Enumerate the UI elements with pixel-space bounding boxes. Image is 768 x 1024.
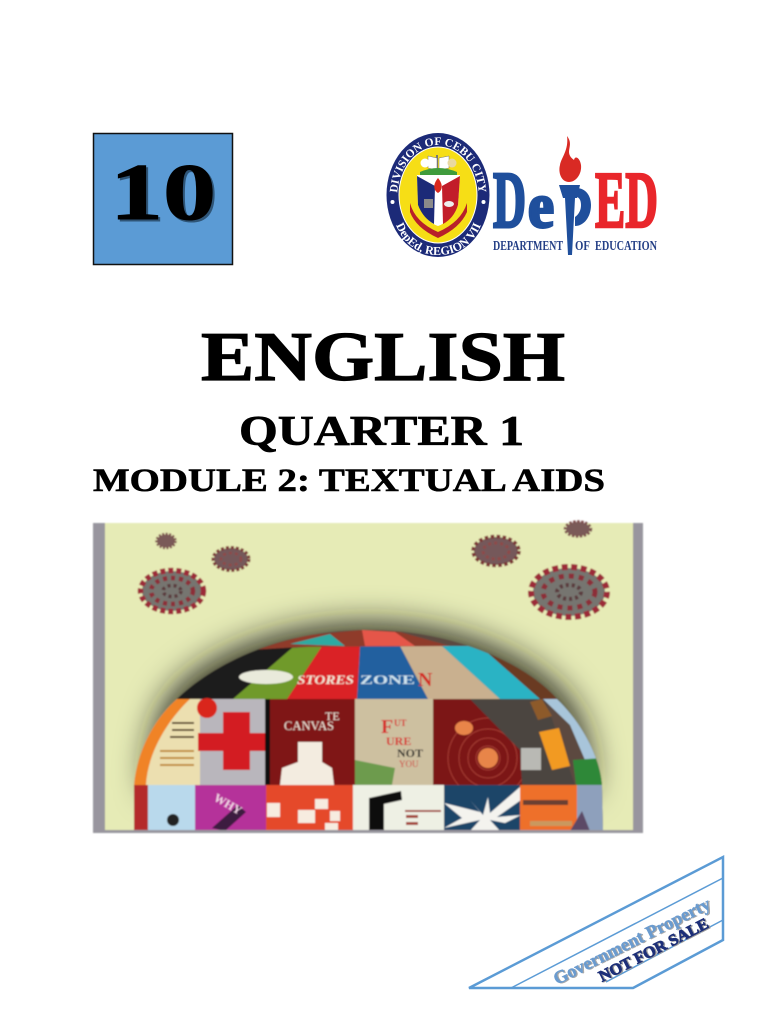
middle row covers: TE	[325, 709, 340, 723]
title: English: ENGLISH	[201, 319, 565, 396]
middle row covers	[134, 698, 602, 798]
logo: DepED: EDUCATION	[595, 239, 657, 254]
middle row covers: NOT	[397, 746, 423, 760]
bottom row covers: WHY	[212, 790, 245, 818]
cover illustration panel	[93, 522, 643, 833]
logo: Division of Cebu City seal	[386, 133, 490, 257]
logo: DepED	[493, 136, 658, 255]
middle row covers: URE	[386, 734, 411, 748]
logo: Division of Cebu City seal: DepEd, REGION VII	[396, 222, 481, 255]
stamp: Government Property, Not For Sale: NOT FOR SALE	[596, 915, 712, 986]
grade number box	[94, 134, 232, 264]
top row covers: ZONE	[360, 672, 415, 687]
dome shadow	[150, 625, 590, 790]
stamp: Government Property, Not For Sale	[469, 857, 723, 989]
grade number box: 10	[110, 149, 216, 237]
logo: DepED: ED	[595, 157, 658, 245]
bottom row covers	[134, 785, 603, 831]
top row covers: STORES	[297, 672, 354, 687]
heading: module title: MODULE 2: TEXTUAL AIDS	[93, 463, 605, 499]
heading: Quarter 1: QUARTER 1	[239, 409, 524, 455]
logo: DepED: e	[528, 170, 554, 241]
middle row covers: UT	[394, 718, 407, 728]
middle row covers: F	[381, 716, 393, 738]
torch flame	[559, 136, 581, 182]
stamp: Government Property, Not For Sale: Government Property	[550, 893, 714, 989]
stamp: Government Property, Not For Sale: Government Property	[551, 894, 715, 989]
top row covers: N	[418, 669, 433, 691]
dome of book covers	[130, 625, 610, 831]
stamp: Government Property, Not For Sale: NOT FOR SALE	[597, 916, 713, 986]
logo: DepED: D	[493, 157, 526, 245]
virus particles	[140, 522, 607, 617]
middle row covers: YOU	[399, 759, 419, 769]
top row covers	[170, 628, 560, 699]
logo: DepED: OF	[575, 239, 590, 254]
middle row covers: CANVAS	[284, 718, 334, 733]
grade number box: 10	[112, 151, 218, 239]
logo: DepED: DEPARTMENT	[493, 239, 563, 254]
logo: Division of Cebu City seal: DIVISION OF CEBU CITY	[390, 137, 486, 193]
